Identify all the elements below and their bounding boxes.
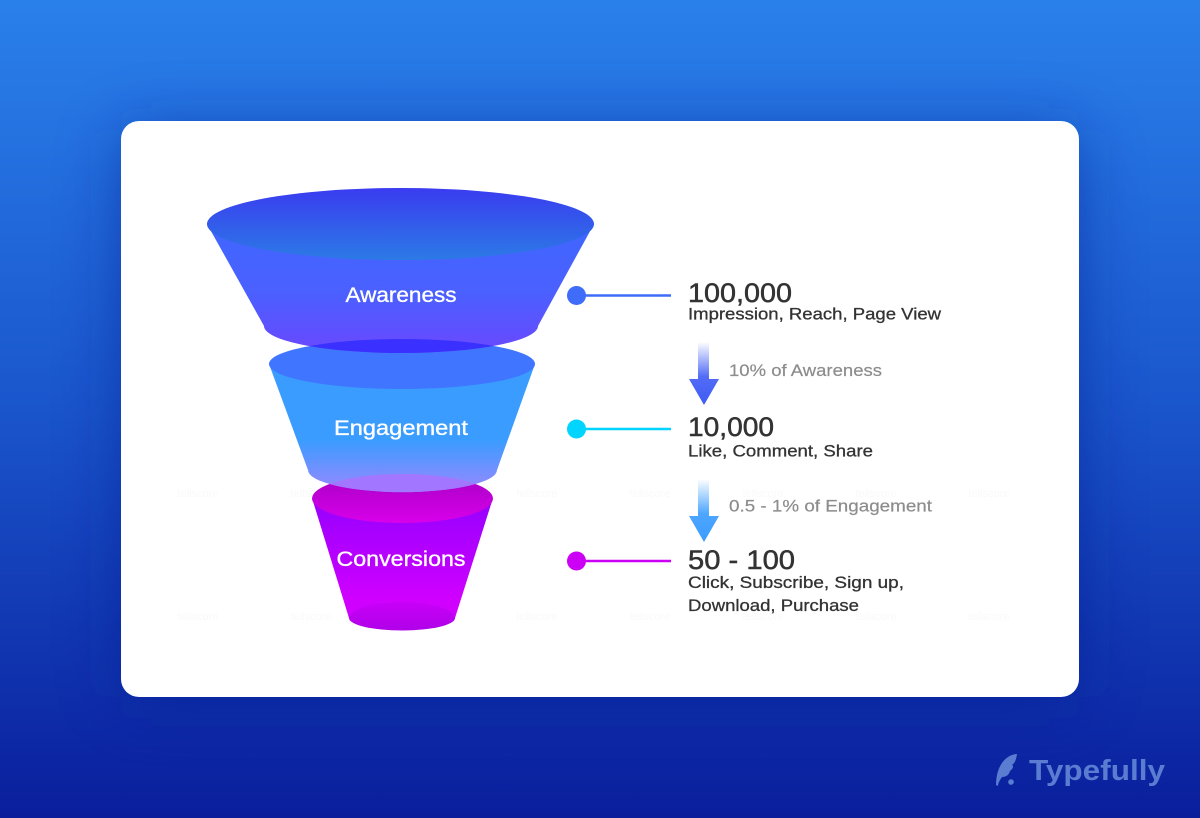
connector: conversions: [567, 552, 671, 570]
arrow: awareness to engagement: [689, 342, 719, 405]
watermark pattern: tellscore: [969, 488, 1009, 500]
watermark pattern: [178, 488, 1009, 623]
label: awareness: Awareness: [346, 284, 456, 307]
text block: engagement metric: 10,000: [688, 412, 774, 442]
text block: conversions metric: [688, 545, 904, 615]
text block: conversions metric: 50 - 100: [688, 545, 795, 575]
funnel tier: conversions: [312, 474, 493, 630]
watermark pattern: tellscore: [517, 488, 557, 500]
connector: awareness: [567, 286, 671, 305]
icon: feather: [996, 754, 1017, 786]
connector: engagement: [567, 420, 671, 438]
wordmark: Typefully: [1029, 755, 1165, 787]
funnel tier: engagement: [269, 346, 535, 492]
text block: conversions metric: Click, Subscribe, Sign up,: [688, 573, 904, 592]
text block: engagement metric: [688, 412, 873, 460]
watermark pattern: tellscore: [969, 611, 1009, 623]
watermark pattern: tellscore: [630, 488, 670, 500]
text block: awareness metric: Impression, Reach, Page View: [688, 304, 942, 324]
text block: conversions metric: Download, Purchase: [688, 596, 859, 615]
watermark pattern: tellscore: [743, 488, 783, 500]
panel: white card: [121, 121, 1079, 697]
watermark pattern: tellscore: [856, 611, 896, 623]
arrow: engagement to conversions: [689, 479, 719, 542]
funnel tier: awareness: [207, 188, 594, 353]
label: engagement: Engagement: [334, 417, 468, 440]
brand: Typefully logo: [996, 754, 1165, 787]
note: 0.5 - 1% of engagement: 0.5 - 1% of Engagement: [729, 496, 932, 516]
watermark pattern: tellscore: [291, 488, 331, 500]
watermark pattern: tellscore: [743, 611, 783, 623]
watermark pattern: tellscore: [517, 611, 557, 623]
watermark pattern: tellscore: [630, 611, 670, 623]
watermark pattern: tellscore: [856, 488, 896, 500]
text block: awareness metric: [688, 278, 942, 324]
watermark pattern: tellscore: [178, 611, 218, 623]
label: conversions: Conversions: [336, 548, 466, 571]
watermark pattern: tellscore: [291, 611, 331, 623]
funnel: [207, 188, 594, 630]
watermark pattern: tellscore: [178, 488, 218, 500]
text block: engagement metric: Like, Comment, Share: [688, 442, 873, 460]
card shadow: [121, 130, 1079, 697]
note: 10% of awareness: 10% of Awareness: [729, 361, 882, 380]
text block: awareness metric: 100,000: [688, 278, 792, 308]
